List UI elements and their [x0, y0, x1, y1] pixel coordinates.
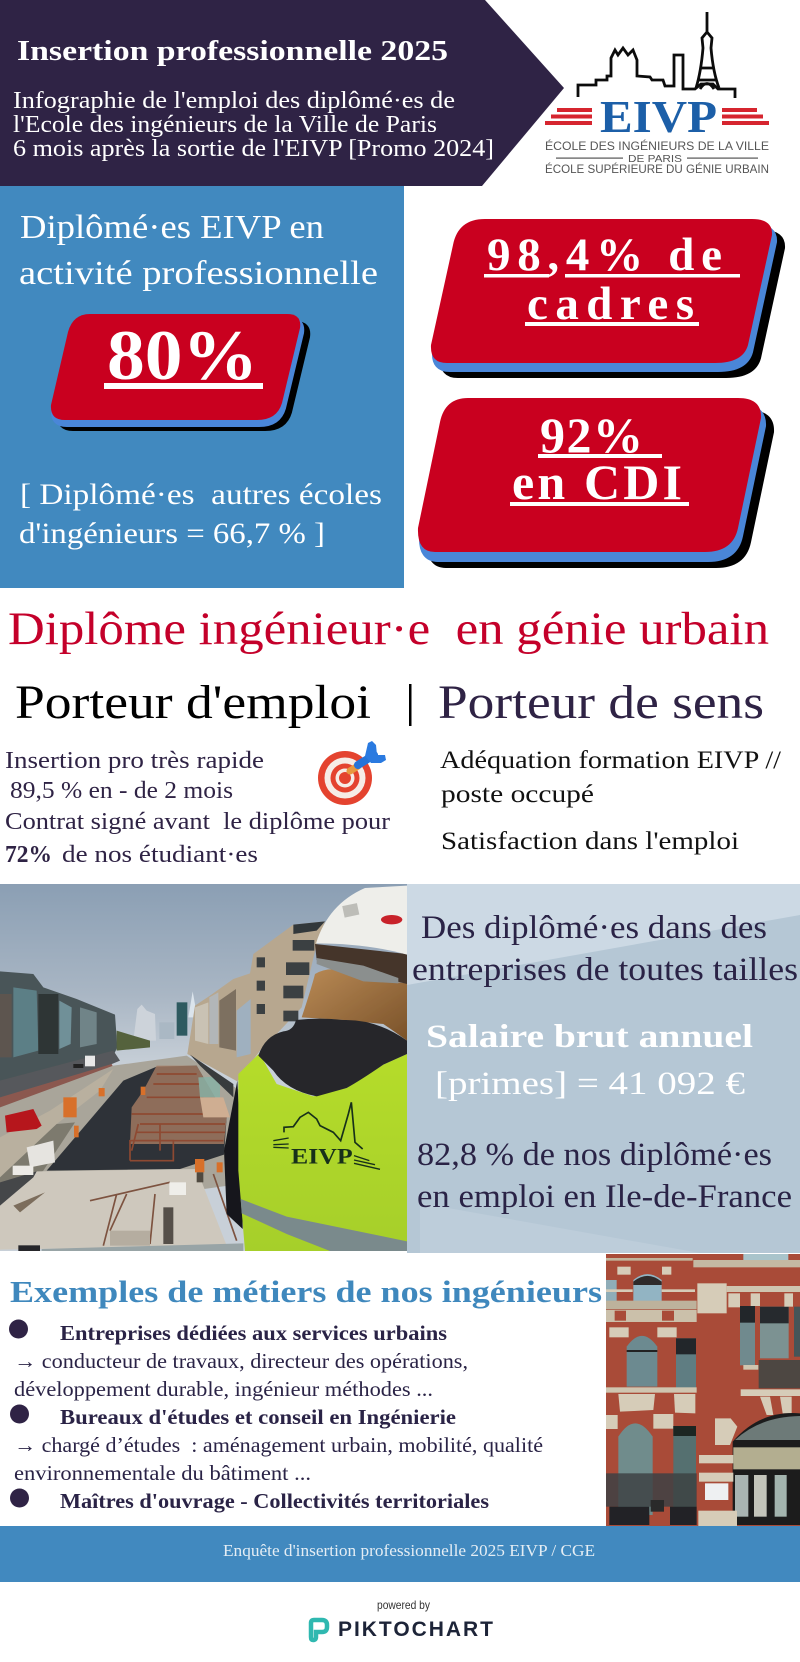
item: bureaux d'études: Bureaux d'études et conseil en Ingénierie [60, 1405, 456, 1429]
text block: insertion rapide: Contrat signé avant le diplôme pour [5, 809, 390, 835]
heading: exemples de métiers: Exemples de métiers de nos ingénieurs [10, 1274, 602, 1309]
stat badge: 80%: 80% [107, 317, 258, 395]
text block: insertion rapide: de nos étudiant·es [62, 842, 258, 868]
panel: salaire et emploi [407, 884, 800, 1253]
text: Ile-de-France: 82,8 % de nos diplômé·es [417, 1137, 772, 1173]
text: tailles d'entreprises: entreprises de toutes tailles [412, 952, 798, 988]
text: Ile-de-France [417, 1137, 792, 1215]
icon: Paris skyline [578, 12, 735, 98]
text block: insertion rapide: 89,5 % en - de 2 mois [10, 778, 233, 804]
footer bar [0, 1526, 800, 1582]
piktochart brand: PIKTOCHART [338, 1618, 493, 1641]
heading: Diplômé·es EIVP en [20, 209, 324, 246]
ground and site [0, 1056, 240, 1217]
heading separator [409, 684, 412, 726]
item detail: services urbains [14, 1349, 468, 1401]
item detail: bureaux d'études: environnementale du bâtiment ... [14, 1461, 311, 1485]
text: salaire: [primes] = 41 092 € [435, 1066, 745, 1102]
subtitle [13, 88, 494, 162]
stat badge: 92% en CDI [418, 398, 772, 566]
vest logo: EIVP [291, 1143, 353, 1168]
helmet strap [317, 958, 398, 983]
front concrete slab [0, 1169, 227, 1250]
logo wordmark: EIVP [600, 91, 717, 142]
panel: diplômés en activité [0, 186, 404, 588]
logo stripes [545, 108, 769, 125]
piktochart brand: powered by [377, 1598, 430, 1612]
subtitle: Infographie de l'emploi des diplômé·es de [13, 88, 455, 114]
vest logo [273, 1102, 380, 1169]
item detail: bureaux d'études [14, 1433, 543, 1485]
heading [19, 209, 378, 292]
bullet [10, 1488, 29, 1508]
comparison text: d'ingénieurs = 66,7 % ] [19, 517, 325, 550]
helmet [316, 886, 407, 955]
text: Ile-de-France: en emploi en Ile-de-France [417, 1179, 792, 1215]
title: Insertion professionnelle 2025 [17, 35, 448, 67]
logo caption [545, 140, 769, 176]
vest [238, 1053, 407, 1251]
piktochart brand [311, 1598, 493, 1641]
helmet interior [315, 944, 407, 984]
section heading: diplôme: Diplôme ingénieur·e en génie urbain [8, 603, 769, 655]
hair [302, 969, 407, 1041]
item: services urbains: Entreprises dédiées aux services urbains [60, 1321, 447, 1345]
bullet [9, 1320, 28, 1338]
icon: piktochart [311, 1620, 327, 1640]
heading: activité professionnelle [19, 255, 378, 292]
text block: porteur de sens: Satisfaction dans l'emploi [441, 828, 739, 855]
stat badge: 98,4% de cadres [431, 219, 783, 376]
balustrade [190, 1055, 233, 1097]
text block: porteur de sens: poste occupé [441, 781, 594, 808]
logo caption: DE PARIS [628, 154, 682, 165]
item: maîtres d'ouvrage: Maîtres d'ouvrage - Collectivités territoriales [60, 1489, 489, 1513]
text: salaire [426, 1019, 753, 1102]
subtitle: l'Ecole des ingénieurs de la Ville de Paris [13, 112, 437, 138]
bullet [10, 1404, 29, 1424]
red van [5, 1109, 42, 1132]
text block: insertion rapide [5, 748, 390, 868]
list: métiers [9, 1320, 543, 1513]
footer bar: Enquête d'insertion professionnelle 2025 EIVP / CGE [223, 1541, 595, 1560]
heading: porteur d'emploi: Porteur d'emploi [15, 676, 371, 729]
reflective strip [241, 1199, 407, 1251]
comparison text [19, 478, 382, 550]
text: tailles d'entreprises: Des diplômé·es dans des [421, 910, 767, 946]
stat badge: 98,4% de cadres: cadres [527, 278, 694, 330]
item detail: services urbains: → conducteur de travaux, directeur des opérations, [14, 1349, 468, 1373]
stat badge: 92% en CDI: 92% [540, 407, 643, 463]
stat badge: 98,4% de cadres: 98,4% de [487, 229, 722, 281]
photo: chantier and engineer in EIVP vest [0, 884, 407, 1251]
text block: porteur de sens [440, 747, 781, 855]
stat badge: 80% [51, 314, 308, 429]
jacket sleeve [224, 1081, 243, 1229]
text: salaire: Salaire brut annuel [426, 1019, 753, 1055]
heading: porteur de sens: Porteur de sens [438, 676, 764, 729]
text block: porteur de sens: Adéquation formation EIVP // [440, 747, 781, 774]
workers [63, 1087, 223, 1172]
stat badge: 92% en CDI: en CDI [512, 454, 682, 510]
photo: EIVP brick building [606, 1254, 800, 1526]
logo: EIVP [545, 12, 769, 176]
item detail: bureaux d'études: → chargé d’études : aménagement urbain, mobilité, qualité [14, 1433, 543, 1457]
logo caption: ÉCOLE SUPÉRIEURE DU GÉNIE URBAIN [545, 163, 769, 176]
subtitle: 6 mois après la sortie de l'EIVP [Promo 2024] [13, 136, 494, 162]
text: tailles d'entreprises [412, 910, 798, 988]
header banner [0, 0, 564, 186]
text block: insertion rapide: Insertion pro très rapide [5, 748, 264, 774]
left road [0, 1051, 120, 1111]
comparison text: [ Diplômé·es autres écoles [20, 478, 382, 511]
item detail: services urbains: développement durable, ingénieur méthodes ... [14, 1377, 433, 1401]
text block: insertion rapide: 72% [5, 842, 52, 868]
icon: target with dart [318, 741, 386, 805]
left buildings [0, 971, 117, 1082]
far towers [133, 991, 197, 1041]
hood [258, 1019, 407, 1096]
logo caption: ÉCOLE DES INGÉNIEURS DE LA VILLE [545, 140, 769, 153]
right buildings [187, 921, 325, 1081]
